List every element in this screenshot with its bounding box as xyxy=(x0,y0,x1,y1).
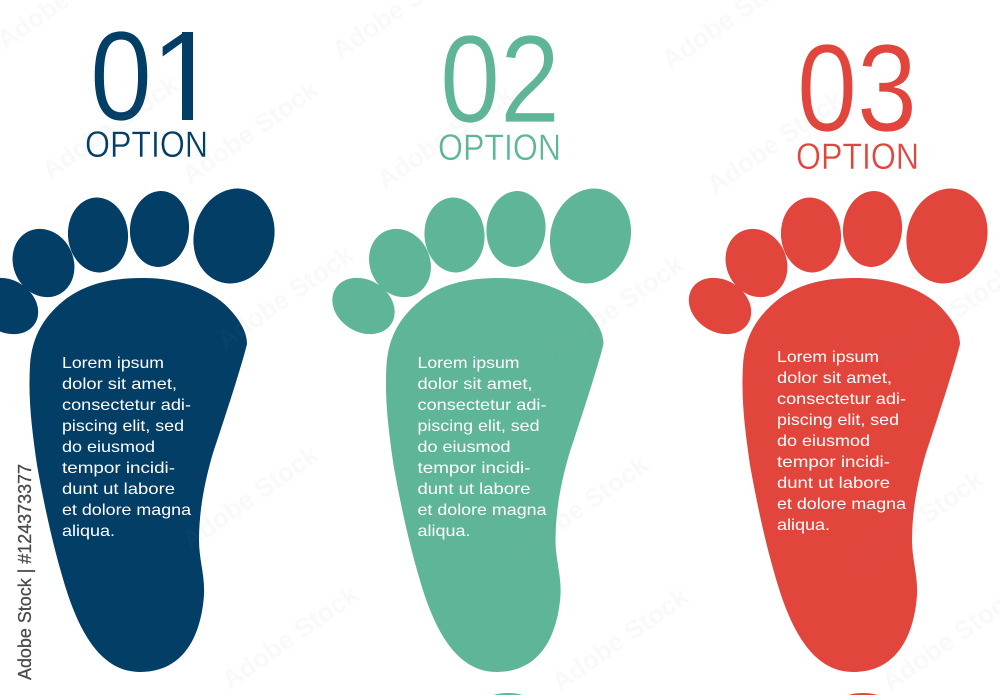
body text: aliqua. xyxy=(777,517,830,534)
body text: piscing elit, sed xyxy=(418,418,540,435)
body text: piscing elit, sed xyxy=(62,418,184,435)
watermarks: Adobe Stock xyxy=(211,239,359,355)
watermarks: Adobe Stock xyxy=(176,74,324,190)
body text: tempor incidi- xyxy=(62,460,175,477)
watermarks: Adobe Stock xyxy=(371,79,519,195)
watermarks: Adobe Stock xyxy=(541,249,689,365)
body text: piscing elit, sed xyxy=(777,412,899,429)
number 03: 03 xyxy=(797,20,917,158)
watermarks: Adobe Stock xyxy=(36,69,184,185)
panel: option 01 xyxy=(0,5,285,672)
body text: dolor sit amet, xyxy=(62,376,177,393)
number 01: 1 xyxy=(150,5,221,147)
body text xyxy=(777,349,906,534)
label OPTION: OPTION xyxy=(796,136,919,177)
number 01 xyxy=(90,5,221,147)
body text: do eiusmod xyxy=(62,439,155,456)
number 02: 02 xyxy=(440,11,560,149)
watermarks: Adobe Stock xyxy=(701,84,849,200)
body text: dunt ut labore xyxy=(62,481,175,498)
body text: tempor incidi- xyxy=(418,460,530,477)
label OPTION: OPTION xyxy=(438,127,561,168)
body text xyxy=(62,355,191,540)
watermarks: Adobe Stock xyxy=(216,579,364,695)
body text: do eiusmod xyxy=(777,433,870,450)
watermarks: Adobe Stock xyxy=(841,464,989,580)
body text: consectetur adi- xyxy=(418,397,546,414)
body text: et dolore magna xyxy=(777,496,906,513)
body text xyxy=(418,355,547,540)
body text: dunt ut labore xyxy=(777,475,890,492)
body text: dunt ut labore xyxy=(418,481,531,498)
body text: consectetur adi- xyxy=(62,397,191,414)
stock id side label: Adobe Stock | #124373377 xyxy=(14,464,35,680)
watermarks: Adobe Stock xyxy=(176,439,324,555)
body text: consectetur adi- xyxy=(777,391,906,408)
panel: option 02 xyxy=(322,11,642,672)
footprint xyxy=(322,179,642,672)
body text: Lorem ipsum xyxy=(62,355,164,372)
next row toe tips at bottom edge xyxy=(490,693,881,695)
body text: tempor incidi- xyxy=(777,454,890,471)
footprint xyxy=(0,179,285,672)
body text: do eiusmod xyxy=(418,439,510,456)
body text: Lorem ipsum xyxy=(777,349,879,366)
watermarks: Adobe Stock xyxy=(506,449,654,565)
body text: dolor sit amet, xyxy=(418,376,532,393)
watermarks: Adobe Stock xyxy=(546,581,694,695)
number 01: 0 xyxy=(90,5,152,147)
body text: dolor sit amet, xyxy=(777,370,892,387)
body text: et dolore magna xyxy=(62,502,191,519)
body text: et dolore magna xyxy=(418,502,547,519)
footprint xyxy=(678,179,998,672)
label OPTION: OPTION xyxy=(85,124,208,165)
body text: Lorem ipsum xyxy=(418,355,520,372)
body text: aliqua. xyxy=(62,523,115,540)
panel: option 03 xyxy=(678,20,998,672)
body text: aliqua. xyxy=(418,523,470,540)
